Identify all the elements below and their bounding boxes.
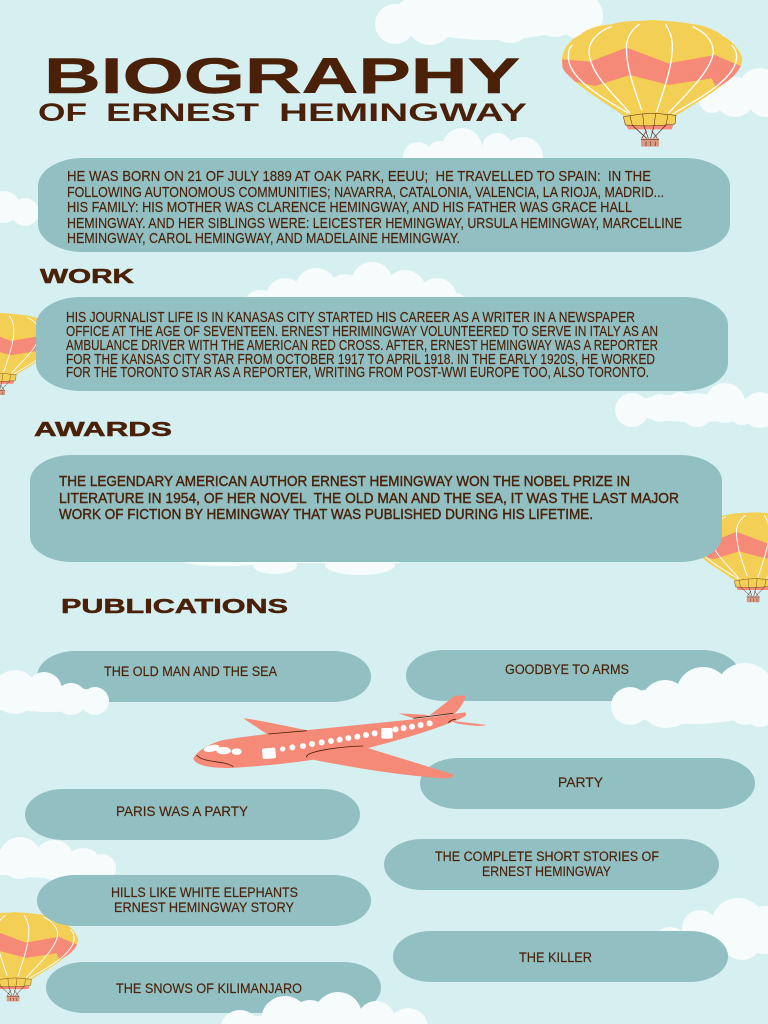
publication: goodbye to arms: GOODBYE TO ARMS [505, 662, 629, 677]
panel: awards: WORK OF FICTION BY HEMINGWAY THAT WAS PUBLISHED DURING HIS LIFETIME. [59, 507, 593, 523]
panel: work [36, 297, 728, 391]
cloud: above intro panel [403, 128, 543, 177]
panel: awards: THE LEGENDARY AMERICAN AUTHOR ERNEST HEMINGWAY WON THE NOBEL PRIZE IN [59, 474, 630, 490]
panel: early life: HEMINGWAY, CAROL HEMINGWAY, AND MADELAINE HEMINGWAY. [67, 231, 460, 247]
heading: awards: AWARDS [34, 419, 172, 441]
panel: early life: HE WAS BORN ON 21 OF JULY 1889 AT OAK PARK, EEUU; HE TRAVELLED TO SPAIN: IN THE [67, 169, 651, 185]
publication: hills like white elephants: ERNEST HEMINGWAY STORY [114, 900, 294, 915]
publication: the snows of kilimanjaro [46, 962, 381, 1013]
title: ERNEST [106, 99, 259, 127]
heading: publications: PUBLICATIONS [61, 596, 288, 618]
panel: work: FOR THE TORONTO STAR AS A REPORTER, WRITING FROM POST-WWI EUROPE TOO, ALSO TORONTO. [66, 365, 649, 381]
cloud: right of publications [611, 663, 768, 728]
cloud: below awards panel [185, 555, 400, 575]
cloud: top [375, 0, 603, 45]
panel: awards: LITERATURE IN 1954, OF HER NOVEL THE OLD MAN AND THE SEA, IT WAS THE LAST MAJOR [59, 491, 679, 507]
publication: the old man and the sea [37, 651, 371, 702]
publication: goodbye to arms [406, 650, 740, 701]
publication: the complete short stories: THE COMPLETE SHORT STORIES OF [435, 849, 659, 864]
balloon: top right [562, 20, 742, 147]
balloon: bottom left [0, 912, 78, 1001]
publication: party [420, 758, 755, 809]
publication: hills like white elephants: HILLS LIKE WHITE ELEPHANTS [111, 885, 298, 900]
publication: party: PARTY [558, 775, 603, 790]
publication: the snows of kilimanjaro: THE SNOWS OF KILIMANJARO [116, 981, 302, 996]
heading: work: WORK [40, 266, 135, 288]
title: HEMINGWAY [279, 99, 528, 127]
publication: the killer [393, 931, 728, 982]
title [38, 48, 528, 127]
publication: paris was a party [25, 789, 360, 840]
publication: the old man and the sea: THE OLD MAN AND THE SEA [104, 664, 277, 679]
panel: early life [38, 158, 730, 252]
balloon: right of awards panel [691, 512, 768, 602]
cloud: lower right [652, 898, 768, 963]
cloud: left of intro panel [0, 191, 39, 226]
cloud: bottom [220, 992, 428, 1024]
publication: the complete short stories [384, 839, 719, 890]
balloon: left of work panel [0, 313, 59, 395]
panel: early life: HEMINGWAY. AND HER SIBLINGS WERE: LEICESTER HEMINGWAY, URSULA HEMINGWAY, MARCELLINE [67, 216, 682, 232]
publication: the complete short stories: ERNEST HEMINGWAY [482, 864, 611, 879]
icon: airplane [193, 696, 487, 778]
publication: hills like white elephants [37, 875, 371, 926]
panel: work: FOR THE KANSAS CITY STAR FROM OCTOBER 1917 TO APRIL 1918. IN THE EARLY 1920S, HE WORKED [66, 352, 655, 368]
publication: paris was a party: PARIS WAS A PARTY [116, 804, 248, 819]
panel: early life: FOLLOWING AUTONOMOUS COMMUNITIES; NAVARRA, CATALONIA, VALENCIA, LA RIOJA, MADRID... [67, 185, 664, 201]
cloud: lower left [0, 837, 116, 888]
publication: the killer: THE KILLER [519, 950, 592, 965]
cloud: left of publications [0, 670, 109, 715]
title: BIOGRAPHY [44, 48, 520, 104]
panel: work: HIS JOURNALIST LIFE IS IN KANASAS CITY STARTED HIS CAREER AS A WRITER IN A NEWSPAPER [66, 310, 635, 326]
cloud: right of work panel [615, 383, 768, 428]
cloud: behind work panel [244, 262, 470, 323]
panel: awards [30, 455, 722, 562]
panel: early life: HIS FAMILY: HIS MOTHER WAS CLARENCE HEMINGWAY, AND HIS FATHER WAS GRACE HALL [67, 200, 632, 216]
cloud: right of title [699, 68, 768, 117]
title: OF [38, 99, 87, 127]
